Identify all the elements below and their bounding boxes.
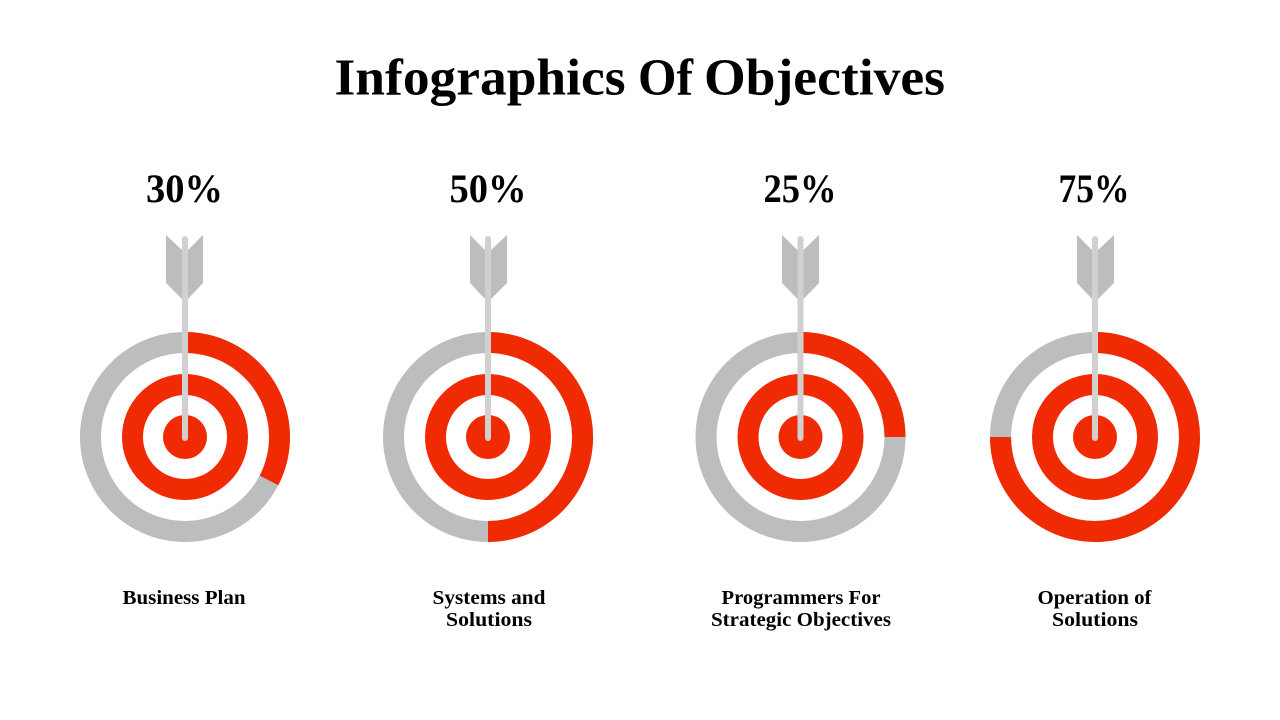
label: Systems and Solutions: Solutions bbox=[446, 609, 532, 631]
panel: business plan 30% bbox=[90, 166, 290, 609]
icon: target with arrow 30% bbox=[90, 235, 290, 532]
label: Operation of Solutions: Operation of bbox=[1038, 587, 1152, 609]
percentage: 75%: 75% bbox=[1058, 166, 1130, 211]
label: Programmers For Strategic Objectives bbox=[711, 587, 891, 631]
title: Objectives bbox=[704, 50, 945, 106]
percentage: 30%: 30% bbox=[146, 166, 223, 211]
title: Of bbox=[638, 50, 694, 106]
panel: systems and solutions 50% bbox=[394, 166, 593, 631]
label: Systems and Solutions bbox=[432, 587, 546, 631]
title: Infographics bbox=[334, 50, 626, 106]
percentage: 50%: 50% bbox=[450, 166, 526, 211]
label: Operation of Solutions bbox=[1038, 587, 1152, 631]
label: Business Plan: Business Plan bbox=[122, 587, 246, 609]
percentage: 25%: 25% bbox=[764, 166, 836, 211]
icon: target with arrow 75% bbox=[990, 235, 1200, 542]
label: Programmers For Strategic Objectives: Strategic Objectives bbox=[711, 609, 891, 631]
label: Programmers For Strategic Objectives: Programmers For bbox=[722, 587, 881, 609]
panel: operation of solutions 75% bbox=[990, 166, 1200, 631]
icon: target with arrow 50% bbox=[394, 235, 593, 542]
label: Operation of Solutions: Solutions bbox=[1052, 609, 1138, 631]
panel: programmers for strategic objectives 25% bbox=[706, 166, 906, 631]
title bbox=[334, 50, 945, 106]
icon: target with arrow 25% bbox=[706, 235, 906, 532]
label: Systems and Solutions: Systems and bbox=[432, 587, 546, 609]
